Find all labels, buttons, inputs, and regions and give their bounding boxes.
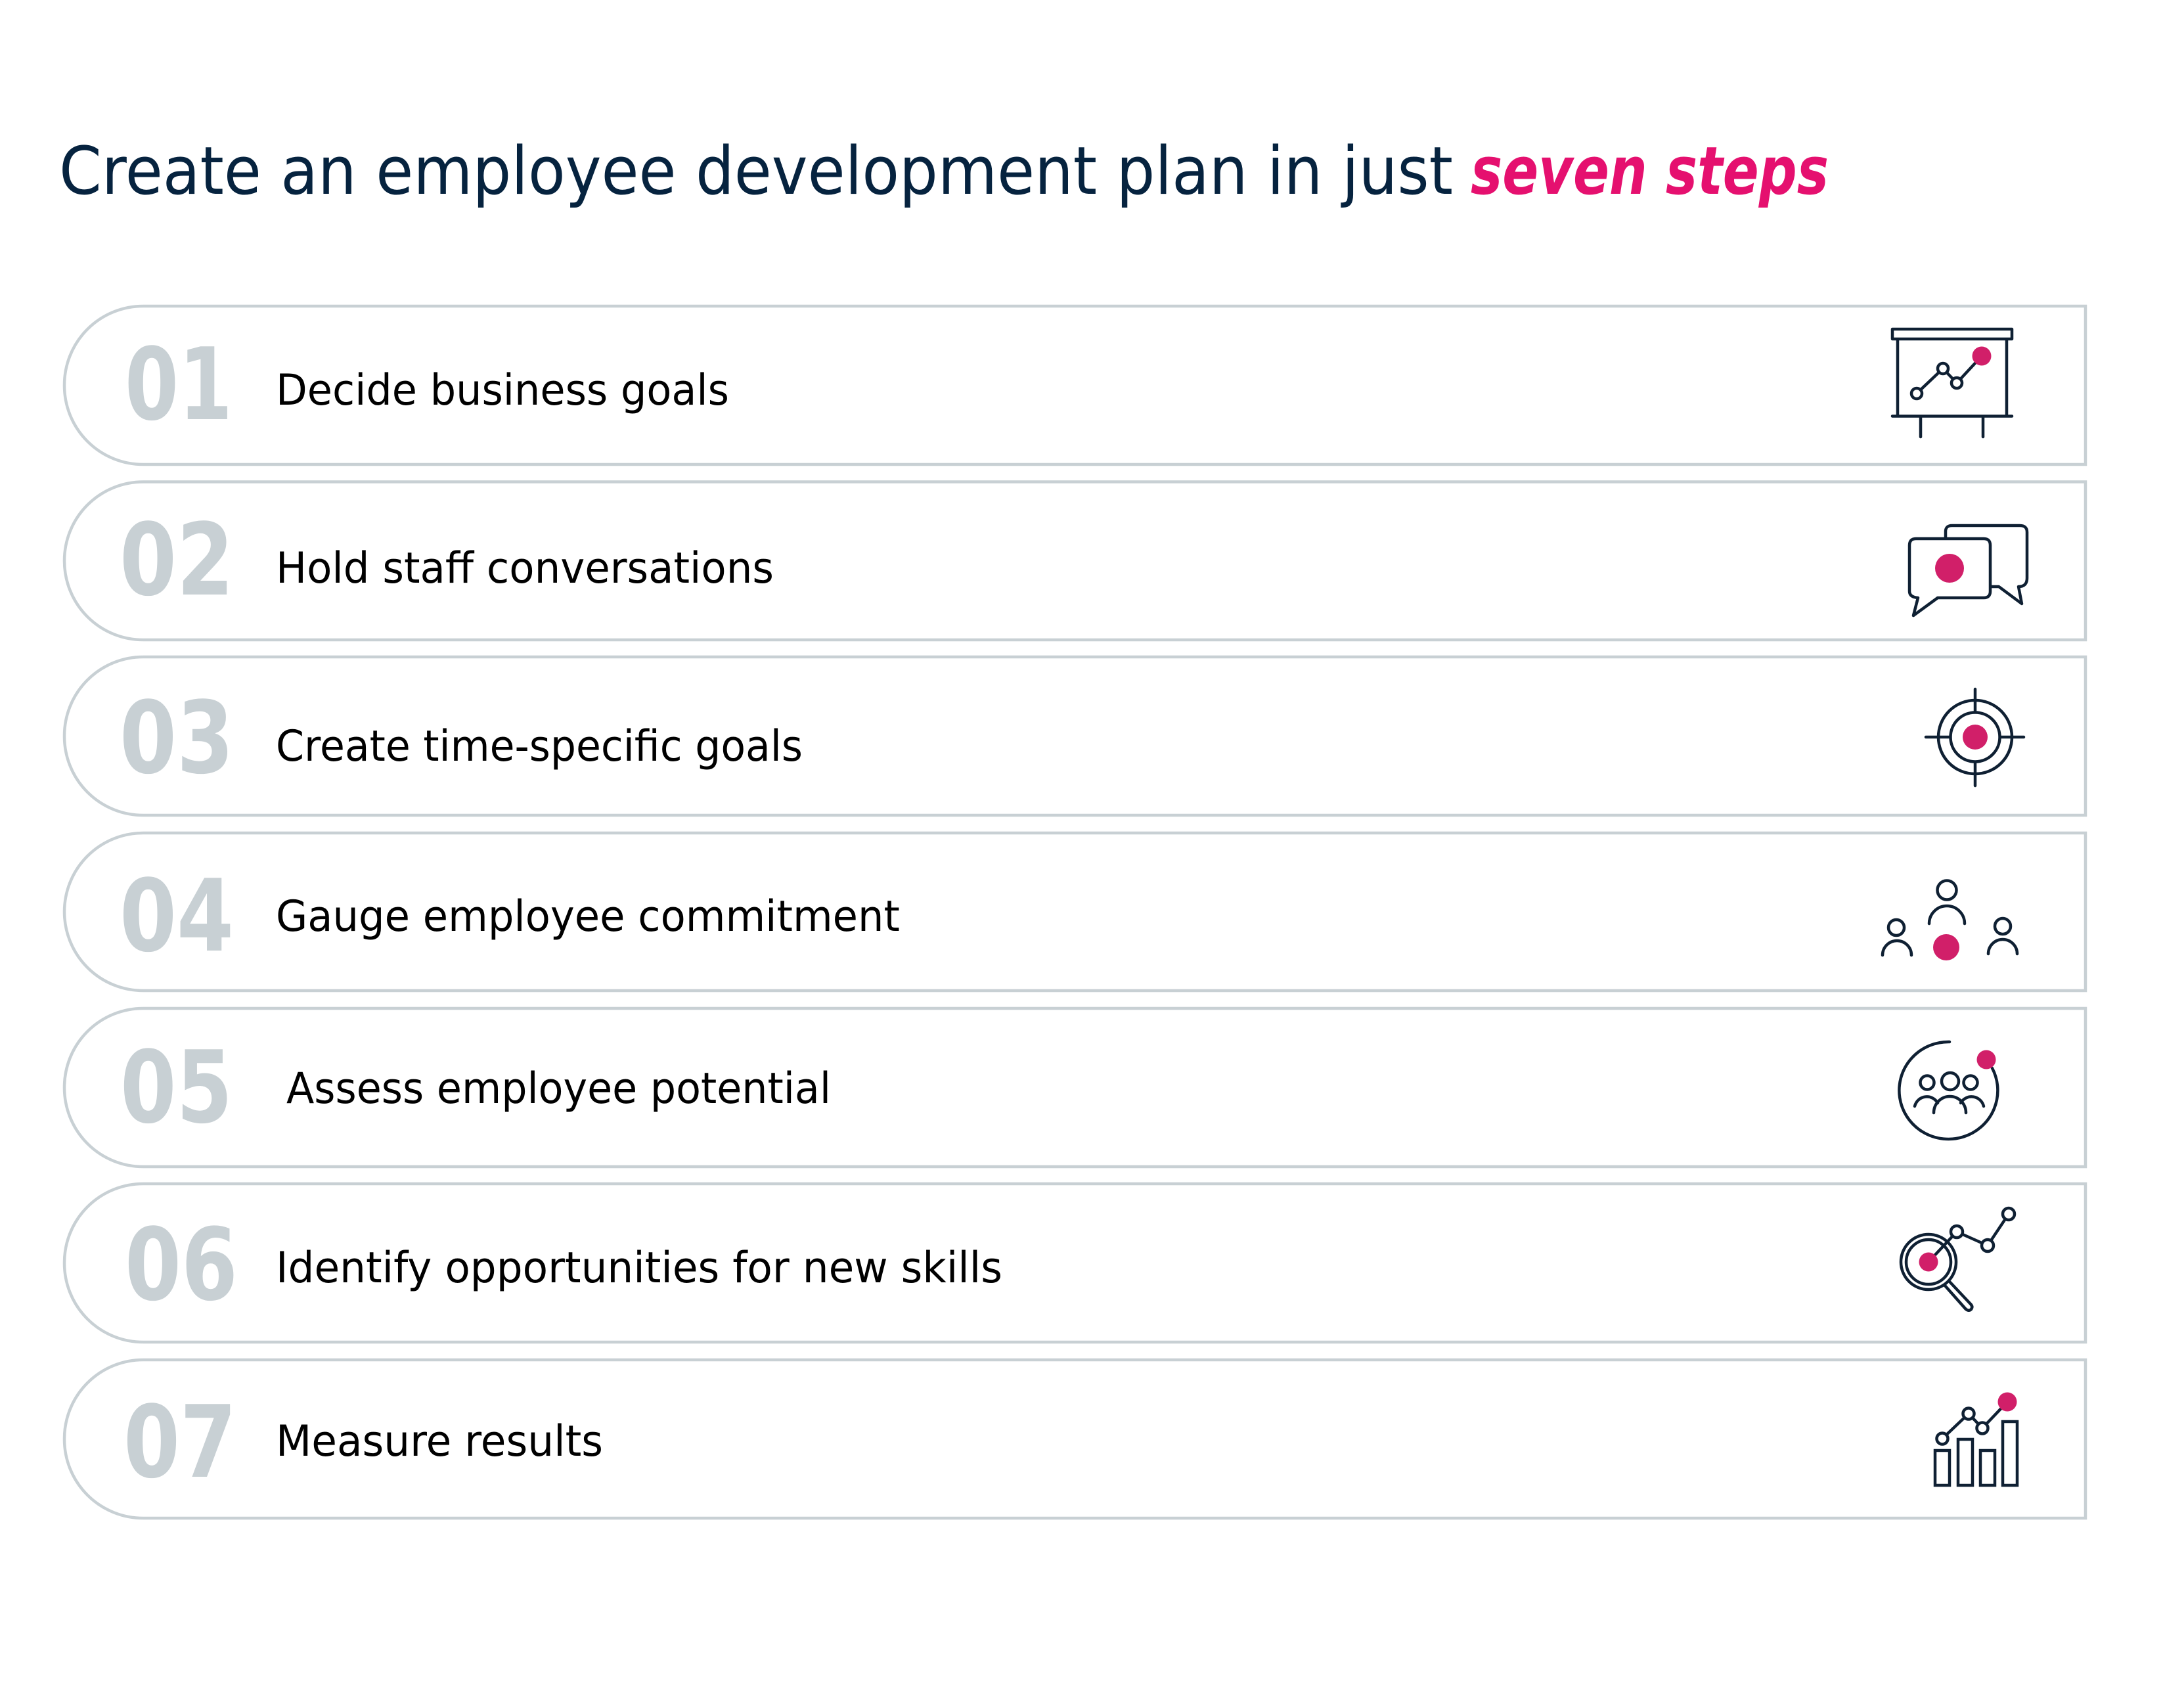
panel: step 04	[64, 833, 2085, 991]
icon: team circle	[1899, 1042, 1997, 1139]
step label 01: Decide business goals	[276, 366, 729, 415]
step label 07: Measure results	[276, 1417, 603, 1466]
step label 02: Hold staff conversations	[276, 544, 774, 593]
panel: step 03	[64, 657, 2085, 815]
panel: step 02	[64, 482, 2085, 640]
step label 03: Create time-specific goals	[276, 722, 803, 771]
step number 02: 02	[120, 502, 234, 618]
step number 05: 05	[120, 1029, 233, 1146]
icon: bar chart with trend	[1935, 1393, 2017, 1485]
panel: step 01	[64, 306, 2085, 464]
icon: magnifier with chart	[1901, 1208, 2015, 1311]
icon: speech bubbles	[1909, 526, 2027, 616]
step number 04: 04	[120, 858, 234, 974]
step number 07: 07	[123, 1384, 236, 1500]
panel: step 07	[64, 1360, 2085, 1518]
step label 06: Identify opportunities for new skills	[276, 1244, 1002, 1293]
title: Create an employee development plan in just	[59, 132, 1453, 210]
panel: step 05	[64, 1008, 2085, 1167]
step number 03: 03	[120, 680, 234, 796]
step label 05: Assess employee potential	[286, 1064, 831, 1113]
step number 01: 01	[125, 326, 233, 443]
title: seven steps	[1471, 132, 1829, 210]
panel: step 06	[64, 1184, 2085, 1342]
icon: target	[1926, 689, 2024, 786]
icon: three people	[1883, 880, 2017, 960]
icon: presentation board	[1892, 329, 2012, 437]
step number 06: 06	[125, 1207, 238, 1323]
step label 04: Gauge employee commitment	[276, 892, 900, 941]
